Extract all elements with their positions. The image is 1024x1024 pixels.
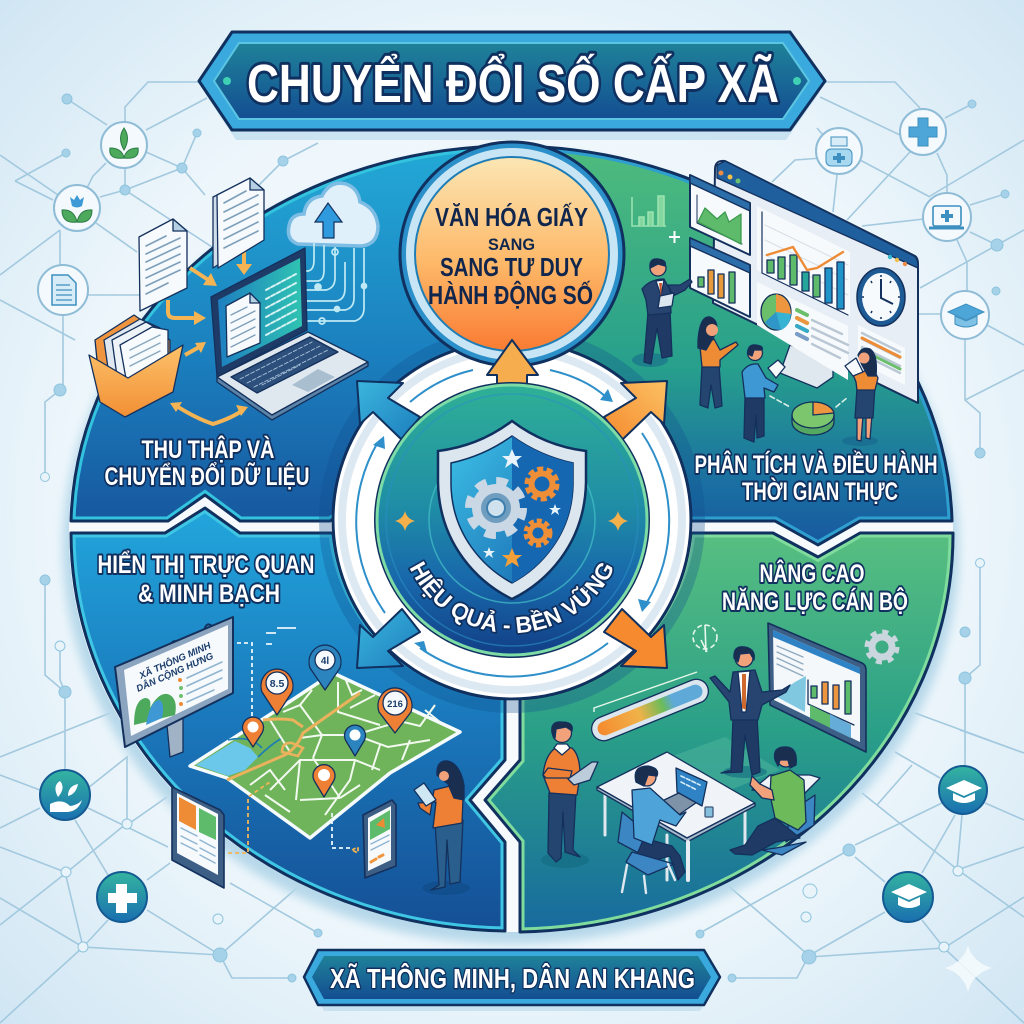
figure: seated man green: [730, 747, 815, 855]
icon: training board: [768, 623, 866, 752]
icon: medical bag node: [816, 128, 862, 174]
arrow heads: [170, 264, 252, 416]
icon: medical cross node: [900, 109, 946, 155]
icon: tablet: [172, 787, 224, 888]
text: circle message: HÀNH ĐỘNG SỐ: [428, 280, 593, 310]
text: panel label collect data: CHUYỂN ĐỔI DỮ LIỆU: [104, 461, 310, 491]
dashed connectors: [228, 628, 358, 853]
arrow: north-east orange: [604, 381, 667, 440]
icon: billboard: DÂN CỘNG HƯNG: [134, 650, 216, 695]
icon: graduation cap dark node B: [883, 872, 933, 922]
icon: folder: [89, 315, 183, 417]
icon: map: [190, 673, 460, 838]
icon: flower node: [54, 185, 100, 231]
text: panel label collect data: [104, 434, 310, 491]
text: circle message: VĂN HÓA GIẤY: [435, 202, 588, 232]
illustration: data collection: [89, 178, 378, 424]
figure: man presenter: [632, 259, 692, 367]
text: circle message: SANG: [488, 235, 535, 254]
icon: map pin 8.5: 8.5: [270, 678, 284, 690]
figure: man with tablet: [742, 345, 785, 442]
footer banner: [304, 950, 720, 1011]
ring: hub shadow: [325, 333, 699, 707]
icon: progress bar: [588, 676, 712, 744]
icon: chart window 1: [690, 175, 750, 255]
icon: billboard: XÃ THÔNG MINH: [136, 639, 214, 682]
text: panel label realtime: THỜI GIAN THỰC: [742, 476, 898, 506]
arrow: top orange: [487, 340, 538, 387]
circuit lines from laptop to cloud: [293, 243, 366, 324]
figure: standing man: [541, 722, 598, 868]
icon: paper sheet A: [139, 219, 187, 311]
text: panel label visual: [98, 550, 314, 608]
text: panel label collect data: THU THẬP VÀ: [142, 434, 274, 464]
text: panel label realtime: [694, 449, 938, 506]
arrow: right arc: [642, 433, 669, 604]
text: footer slogan: XÃ THÔNG MINH, DÂN AN KHANG: [330, 962, 695, 994]
watermark sparkle: [945, 945, 992, 992]
text: hub motto: HIỆU QUẢ - BỀN VỮNG: [408, 559, 614, 635]
icon: small map pins: [242, 717, 366, 797]
icon: chart window 2: [690, 238, 750, 317]
icon: orange gear large: [527, 469, 557, 499]
icon: orange gear small: [526, 521, 550, 545]
icon: cloud upload: [288, 183, 378, 246]
disc base: [69, 146, 953, 932]
arrow: south-east orange: [604, 609, 667, 668]
illustration: training: [541, 623, 897, 893]
illustration: dashboard and team: [632, 161, 918, 446]
icon: graduation cap node: [941, 291, 989, 339]
icon: phone: [363, 800, 396, 878]
circle: paper to digital mindset: [400, 142, 624, 366]
icon: floor: [670, 737, 780, 790]
icon: chart outline: [632, 196, 680, 243]
text: circle message: [428, 202, 593, 310]
figure: woman with phone: [414, 761, 470, 895]
icon: table: [597, 752, 820, 880]
text: panel label capacity: [722, 558, 908, 616]
icon: stars: [483, 449, 561, 558]
arrow: north-west blue: [357, 381, 420, 440]
icon: map pin 4l: 4l: [321, 656, 329, 667]
arrow: left arc: [356, 442, 385, 613]
panel: realtime analysis: [511, 146, 952, 545]
figure: woman in orange: [698, 317, 738, 408]
icon: dashed clock: [693, 625, 717, 652]
figure: seated man blue: [618, 766, 686, 893]
icon: monitor dashboard: [713, 161, 918, 403]
text: title: CHUYỂN ĐỔI SỐ CẤP XÃ: [247, 54, 779, 114]
icon: paper stack B: [213, 178, 264, 268]
icon: plant node: [101, 122, 147, 168]
arrow: top-right arc: [550, 370, 606, 397]
arrow: bottom arc: [420, 643, 608, 677]
hub: efficiency and sustainability: [374, 382, 650, 658]
icon: health cross node: [97, 872, 147, 922]
icon: map pin 8.5: [261, 669, 293, 715]
text: circle message: SANG TƯ DUY: [440, 252, 583, 282]
text: panel label realtime: PHÂN TÍCH VÀ ĐIỀU HÀNH: [694, 449, 938, 479]
text: panel label visual: & MINH BẠCH: [138, 580, 280, 608]
ring: white cycle: [333, 341, 691, 699]
icon: map pin 4l: [309, 645, 341, 690]
icon: clock: [857, 268, 905, 326]
text: panel label visual: HIỂN THỊ TRỰC QUAN: [98, 550, 314, 579]
icon: sparkles: [395, 511, 628, 531]
icon: laptop: [211, 248, 368, 420]
arrow heads on arcs: [373, 389, 651, 652]
figure: presenter: [710, 647, 790, 778]
arrow: orange flows: [168, 240, 244, 424]
icon: silver gear: [470, 482, 522, 534]
icon: map pin 216: [378, 688, 412, 733]
icon: graduation cap dark node A: [939, 766, 987, 814]
disc shadow: [63, 152, 959, 944]
icon: 3D pie: [770, 396, 848, 435]
figure: woman reading: [842, 348, 878, 446]
title banner: [199, 32, 825, 140]
icon: billboard: [115, 617, 233, 757]
icon: gear: [867, 632, 897, 662]
icon: laptop on table: [660, 768, 707, 816]
icon: hand with leaf node: [40, 770, 90, 820]
panel: visual transparency: [71, 508, 505, 931]
icon: document node: [38, 265, 88, 315]
icon: shield: [438, 421, 586, 599]
illustration: public map and billboards: [115, 617, 470, 895]
text: panel label capacity: NÂNG CAO: [760, 558, 864, 588]
panel: staff capacity: [485, 533, 953, 932]
arrow: south-west blue: [357, 609, 420, 668]
icon: monitor stand: [780, 345, 833, 388]
text: panel label capacity: NĂNG LỰC CÁN BỘ: [722, 586, 908, 616]
icon: map pin 216: 216: [387, 699, 403, 710]
panel: collect data: [71, 146, 511, 521]
arrow: top-left arc: [410, 370, 473, 402]
icon: laptop medical node: [923, 193, 971, 241]
